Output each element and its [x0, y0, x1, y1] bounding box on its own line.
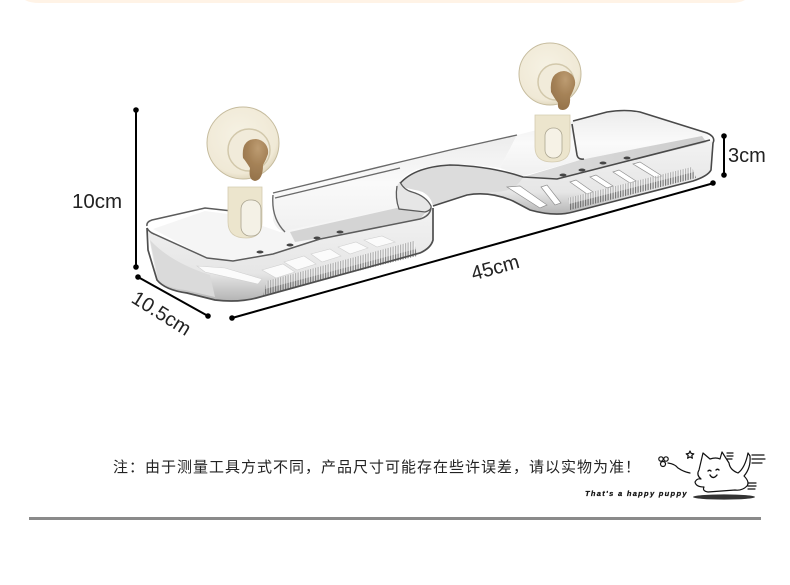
cat shadow	[693, 494, 755, 500]
bottom divider	[29, 517, 761, 520]
left mount plate	[228, 187, 262, 238]
left tray screws	[256, 230, 344, 254]
flower stem	[668, 463, 690, 473]
left tray floor	[153, 207, 428, 260]
note text: 注：由于测量工具方式不同，产品尺寸可能存在些许误差，请以实物为准！	[113, 459, 641, 476]
shelf product photo	[147, 43, 714, 301]
left back rim	[273, 135, 517, 232]
right tray floor	[523, 136, 707, 179]
left tray base edge	[147, 208, 433, 301]
dimension: length 45cm: 45cm	[469, 251, 522, 285]
left hook	[243, 139, 268, 181]
top peach band	[25, 0, 745, 3]
right tray slots	[507, 162, 662, 208]
right suction cup	[519, 43, 581, 105]
right mount plate	[535, 115, 570, 162]
icon: flower	[659, 457, 668, 466]
puppy slogan: That's a happy puppy	[585, 489, 688, 498]
right hook	[551, 71, 575, 110]
icon: cat doodle	[659, 451, 765, 500]
dimension: height 10cm: 10cm	[72, 190, 122, 213]
cat face	[708, 469, 719, 478]
dimension: width 10.5cm: 10.5cm	[128, 287, 195, 341]
left cup inner ring	[228, 129, 270, 171]
S-curve basin floor	[398, 165, 540, 209]
dimension: height 3cm: 3cm	[728, 145, 766, 167]
cat body	[695, 452, 750, 492]
right tray front wall	[467, 141, 712, 214]
left tray front wall	[148, 208, 433, 301]
right tray rib highlight	[568, 167, 694, 204]
motion lines	[727, 453, 765, 489]
star	[686, 451, 694, 458]
right tray rim	[398, 110, 714, 214]
right tray back wall	[500, 110, 710, 176]
dimension: height 3cm	[721, 133, 766, 178]
left tray slots	[197, 236, 395, 284]
left tray rim	[147, 208, 431, 261]
left suction cup	[207, 107, 279, 179]
dimension: length 45cm	[229, 180, 716, 321]
S-curve left post	[396, 182, 431, 212]
left tray side reflection	[150, 240, 215, 297]
left tray back wall	[273, 135, 517, 232]
dimension: width 10.5cm	[128, 274, 211, 341]
left mount clear tip	[241, 200, 261, 236]
right mount clear tip	[545, 128, 562, 158]
left tray gray floor patch	[290, 208, 425, 242]
right tray screws	[560, 156, 630, 176]
right tray ribbed front	[568, 167, 696, 210]
right cup inner ring	[538, 64, 574, 100]
dimension: height 10cm	[72, 107, 139, 270]
left tray ribbed front	[263, 241, 417, 295]
left tray rib highlight	[265, 241, 416, 289]
